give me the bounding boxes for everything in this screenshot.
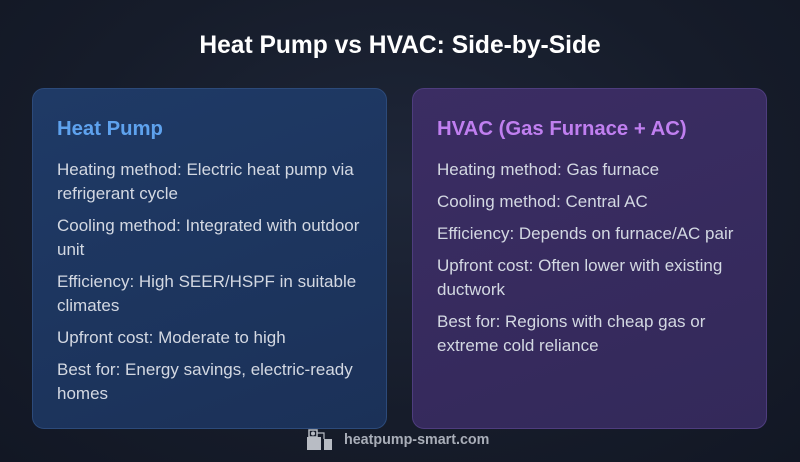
heading: heat pump: Heat Pump <box>57 118 163 140</box>
text: heating: Heating method: Gas furnace <box>437 160 659 179</box>
footer brand <box>307 429 489 450</box>
icon: heat pump <box>307 429 332 450</box>
text: heating: Heating method: Electric heat pump via refrigerant cycle <box>57 160 354 203</box>
panel: hvac <box>412 88 767 429</box>
text: cooling: Cooling method: Integrated with outdoor unit <box>57 216 359 259</box>
text: cooling: Cooling method: Central AC <box>437 192 648 211</box>
text: cost: Upfront cost: Often lower with existing ductwork <box>437 256 722 299</box>
panel: heat pump <box>32 88 387 429</box>
text: efficiency: Efficiency: High SEER/HSPF in suitable climates <box>57 272 356 315</box>
heading: hvac: HVAC (Gas Furnace + AC) <box>437 118 687 140</box>
text: efficiency: Efficiency: Depends on furnace/AC pair <box>437 224 733 243</box>
title: Heat Pump vs HVAC: Side-by-Side <box>199 32 601 59</box>
text: best for: Best for: Energy savings, electric-ready homes <box>57 360 353 403</box>
text: cost: Upfront cost: Moderate to high <box>57 328 286 347</box>
text: best for: Best for: Regions with cheap gas or extreme cold reliance <box>437 312 705 355</box>
footer brand: heatpump-smart.com <box>344 432 489 448</box>
